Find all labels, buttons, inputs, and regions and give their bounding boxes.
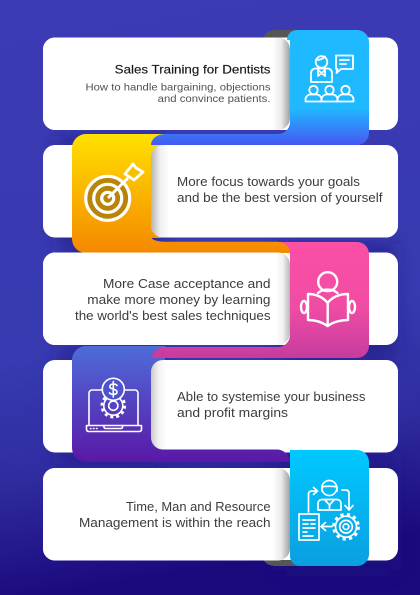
white card backs: [43, 38, 398, 560]
tab: cyan: [290, 450, 369, 566]
icon: laptop with gear and dollar coin: [86, 378, 142, 432]
panel 2: focus card: [151, 145, 398, 238]
text: focus line 2: and be the best version of yourself: [177, 191, 383, 205]
text: case line 2: make more money by learning: [87, 293, 271, 307]
soft shadows behind the tabs: [60, 136, 395, 570]
panel 1: sales training card: [43, 38, 290, 130]
tab: pink: [151, 242, 369, 360]
panel 3: case acceptance card: [43, 252, 290, 345]
icon: person reading a book: [301, 272, 355, 326]
tab: purple: [72, 346, 290, 462]
text: convince line: and convince patients.: [158, 93, 270, 105]
panel 4: systemise card: [151, 360, 398, 450]
text: time line 2: Management is within the reach: [79, 516, 271, 530]
tab: blue: [151, 30, 369, 145]
grey fold bottom: [264, 560, 300, 566]
text: bargaining line: How to handle bargaining, objections: [86, 82, 270, 94]
grey fold top: [264, 30, 300, 38]
text: case line 1: More Case acceptance and: [103, 277, 271, 291]
panel 5: time management card: [43, 468, 290, 560]
tab: yellow-orange: [72, 134, 290, 253]
text: systemise line 1: Able to systemise your business: [177, 390, 366, 404]
icon: manager, document and gear cycle: [299, 480, 358, 540]
icon: target with arrow: [86, 164, 143, 220]
text: time line 1: Time, Man and Resource: [126, 500, 271, 514]
icon: trainer and audience: [306, 56, 354, 102]
text: case line 3: the world's best sales techniques: [75, 309, 270, 323]
text: systemise line 2: and profit margins: [177, 406, 288, 420]
text: focus line 1: More focus towards your goals: [177, 175, 360, 189]
heading: sales training: Sales Training for Dentists: [115, 63, 270, 77]
